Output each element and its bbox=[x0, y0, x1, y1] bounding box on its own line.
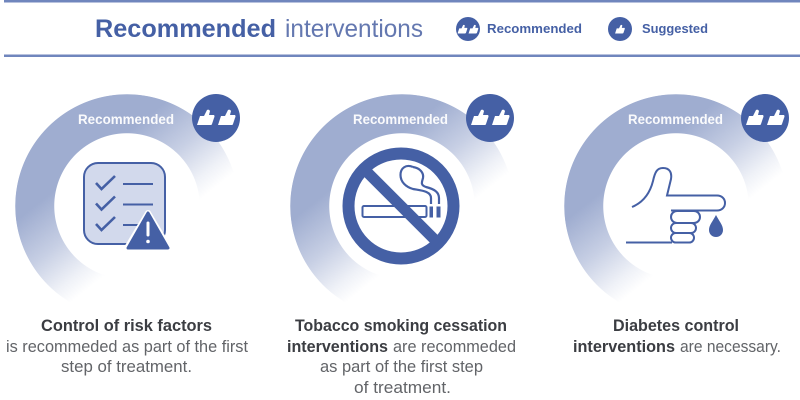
caption bbox=[6, 317, 248, 376]
panel: control of risk factors bbox=[6, 94, 248, 376]
icon: double thumbs up badge bbox=[741, 94, 789, 142]
title: Recommended bbox=[95, 15, 276, 43]
ring label: Recommended bbox=[353, 111, 448, 127]
legend: recommended: Recommended bbox=[487, 21, 582, 36]
caption: of treatment. bbox=[354, 379, 451, 397]
legend: suggested: Suggested bbox=[642, 21, 708, 36]
arc ring bbox=[290, 94, 506, 297]
icon: double thumbs up badge bbox=[192, 94, 240, 142]
caption: are recommeded bbox=[393, 338, 516, 356]
caption: are necessary. bbox=[680, 338, 781, 356]
arc ring bbox=[564, 94, 780, 297]
title: interventions bbox=[285, 15, 423, 43]
caption: interventions bbox=[573, 338, 675, 356]
icon: checklist with warning bbox=[84, 163, 169, 248]
caption: Tobacco smoking cessation bbox=[295, 317, 507, 335]
panel: tobacco smoking cessation bbox=[287, 94, 516, 397]
ring label: Recommended bbox=[628, 111, 723, 127]
legend: suggested bbox=[608, 17, 708, 41]
title bbox=[95, 15, 423, 43]
ring label: Recommended bbox=[78, 111, 174, 127]
caption: interventions bbox=[287, 338, 388, 356]
icon: double thumbs up badge bbox=[466, 94, 514, 142]
icon: finger prick with blood drop bbox=[626, 168, 725, 242]
arc ring bbox=[15, 94, 230, 297]
caption: Control of risk factors bbox=[41, 317, 212, 335]
panel: diabetes control bbox=[564, 94, 789, 356]
caption bbox=[287, 317, 516, 397]
caption: as part of the first step bbox=[320, 358, 483, 376]
legend: recommended bbox=[456, 17, 582, 41]
caption: step of treatment. bbox=[61, 358, 192, 376]
caption bbox=[573, 317, 781, 356]
caption: Diabetes control bbox=[613, 317, 739, 335]
icon: no smoking sign bbox=[337, 142, 465, 270]
header band bbox=[4, 0, 800, 57]
caption: is recommeded as part of the first bbox=[6, 338, 248, 356]
